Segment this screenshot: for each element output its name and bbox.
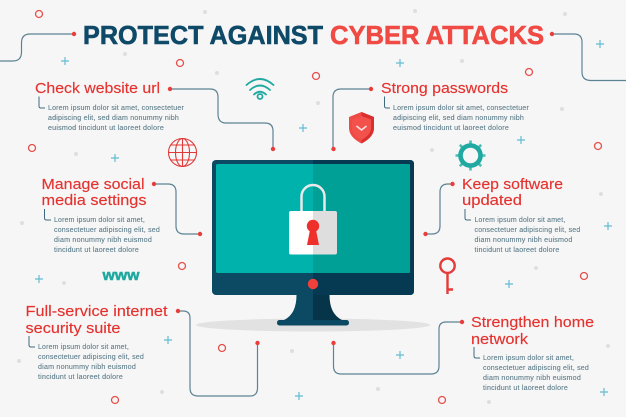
icon: key (440, 258, 455, 294)
panel: strong passwords (381, 80, 529, 132)
padlock (289, 185, 337, 254)
panel: check website url: adipiscing elit, sed diam nonummy nibh (48, 115, 179, 122)
panel: full-service internet security suite: Full-service internet (26, 303, 168, 320)
monitor stand (277, 295, 349, 326)
panel: check website url: Lorem ipsum dolor sit amet, consectetuer (48, 105, 184, 112)
panel: strengthen home network: consectetuer adipiscing elit, sed (483, 365, 589, 372)
icon: wifi (246, 79, 274, 99)
panel: full-service internet security suite: consectetuer adipiscing elit, sed (38, 354, 144, 361)
icon: globe (168, 138, 196, 166)
panel: keep software updated: consectetuer adipiscing elit, sed (474, 227, 580, 234)
title: PROTECT AGAINST (83, 20, 323, 50)
connector: full-service (176, 309, 260, 396)
panel: manage social media settings (42, 176, 160, 254)
connector: keep software updated (423, 182, 455, 236)
panel: manage social media settings: Manage social (42, 176, 144, 193)
panel: keep software updated: Lorem ipsum dolor sit amet, (474, 217, 566, 224)
panel: strengthen home network: Strengthen home (471, 314, 594, 331)
title: CYBER ATTACKS (330, 20, 544, 50)
panel: manage social media settings: consectetuer adipiscing elit, sed (54, 227, 160, 234)
panel: keep software updated: tincidunt ut laoreet dolore (474, 247, 560, 254)
title (83, 20, 544, 50)
panel: check website url (35, 80, 184, 132)
panel: strong passwords: euismod tincidunt ut laoreet dolore (393, 125, 509, 132)
panel: manage social media settings: media settings (42, 192, 146, 209)
panel: strong passwords: Lorem ipsum dolor sit amet, consectetuer (393, 105, 529, 112)
connector: manage social media (152, 182, 202, 236)
monitor body (212, 160, 414, 295)
panel: full-service internet security suite: security suite (26, 320, 120, 337)
panel: strong passwords: Strong passwords (381, 80, 508, 97)
icon: gear (456, 140, 486, 170)
panel: strengthen home network: diam nonummy nibh euismod (483, 375, 581, 382)
panel: full-service internet security suite: tincidunt ut laoreet dolore (38, 374, 123, 381)
monitor with padlock (196, 160, 430, 332)
panel: strengthen home network: Lorem ipsum dolor sit amet, (483, 355, 574, 362)
panel: manage social media settings: tincidunt ut laoreet dolore (54, 247, 139, 254)
panel: keep software updated (462, 176, 580, 254)
panel: keep software updated: updated (462, 192, 522, 209)
icon: www: www (101, 267, 140, 284)
panel: full-service internet security suite: diam nonummy nibh euismod (38, 364, 136, 371)
connector: check website url (168, 87, 275, 151)
panel: full-service internet security suite (26, 303, 168, 381)
panel: manage social media settings: Lorem ipsum dolor sit amet, (54, 217, 145, 224)
panel: check website url: euismod tincidunt ut laoreet dolore (48, 125, 164, 132)
monitor shadow (196, 318, 430, 332)
connector: strong passwords (331, 87, 373, 151)
panel: strengthen home network (471, 314, 594, 392)
connector: strengthen home network (331, 320, 464, 374)
panel: keep software updated: Keep software (462, 176, 563, 193)
panel: check website url: Check website url (35, 80, 160, 97)
connector: title left (0, 32, 76, 61)
panel: keep software updated: diam nonummy nibh euismod (474, 237, 572, 244)
panel: strengthen home network: network (471, 331, 529, 348)
panel: full-service internet security suite: Lorem ipsum dolor sit amet, (38, 344, 129, 351)
icon: shield (349, 112, 374, 144)
panel: manage social media settings: diam nonummy nibh euismod (54, 237, 152, 244)
connector: title right (550, 32, 626, 80)
panel: strengthen home network: tincidunt ut laoreet dolore (483, 385, 568, 392)
panel: strong passwords: adipiscing elit, sed diam nonummy nibh (393, 115, 524, 122)
